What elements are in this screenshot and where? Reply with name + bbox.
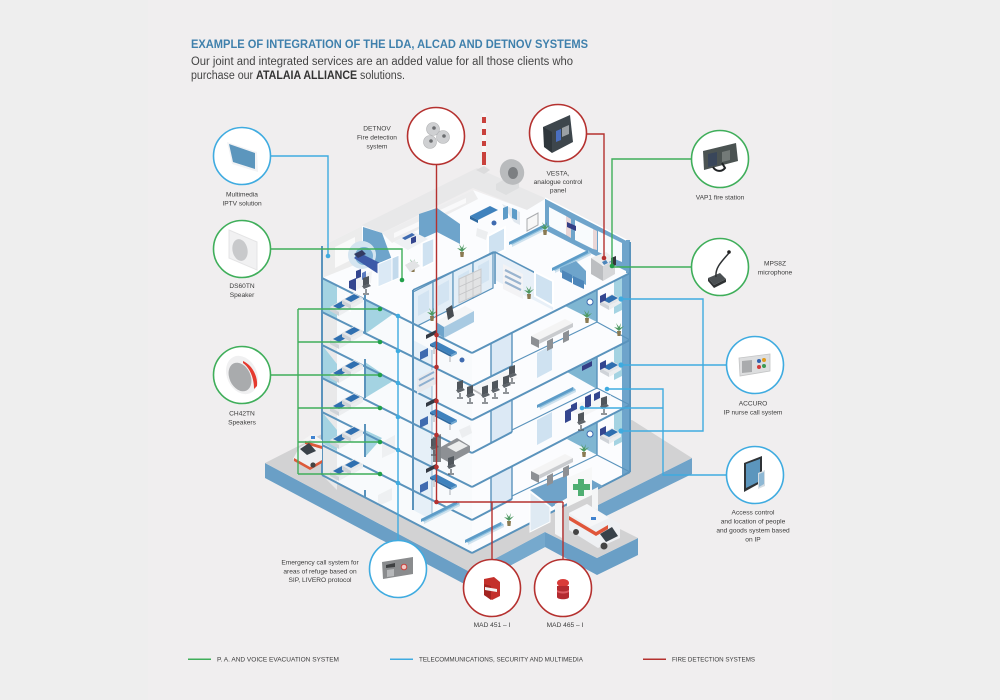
top floor plate xyxy=(322,190,630,353)
device: VESTA panel xyxy=(530,104,586,162)
connector: access control, blue xyxy=(580,387,726,475)
legend xyxy=(188,656,755,664)
nurse station with monitor xyxy=(591,252,616,281)
label: CH42TN: Speakers xyxy=(228,420,257,426)
label: MPS8Z: MPS8Z xyxy=(764,260,786,268)
connector: fire detection riser, red xyxy=(434,165,563,560)
label: VESTA: panel xyxy=(550,188,567,194)
left back wall xyxy=(322,226,362,278)
label: access control: and location of people xyxy=(721,518,786,526)
hospital beds, left wing xyxy=(330,293,363,481)
exam room furniture xyxy=(470,204,520,240)
label: emergency call: areas of refuge based on xyxy=(283,568,357,576)
legend item: fire detection: FIRE DETECTION SYSTEMS xyxy=(672,656,755,664)
shelf units xyxy=(459,264,523,303)
label: Multimedia IPTV: Multimedia xyxy=(226,192,258,198)
floor plants xyxy=(504,310,624,526)
satellite dish xyxy=(496,155,528,195)
device: DS60TN speaker xyxy=(214,220,270,278)
rear roof band wall xyxy=(382,190,478,243)
device: MPS8Z microphone xyxy=(692,238,748,296)
label: MPS8Z: microphone xyxy=(758,270,793,276)
label: DETNOV: Fire detection xyxy=(357,134,397,142)
left wing walls and rooms xyxy=(322,278,472,553)
connector: CH42TN speaker bus, green xyxy=(271,307,382,476)
label: VESTA: VESTA, xyxy=(547,170,569,178)
intro text: Our joint and integrated services are an added value for all those clients who xyxy=(191,56,573,68)
device: MAD 465-I siren xyxy=(534,560,592,616)
label: access control: on IP xyxy=(745,536,761,544)
doors of scanner room xyxy=(378,238,434,287)
office in back room xyxy=(394,232,467,272)
right back wall xyxy=(545,198,630,273)
label: emergency call: SIP, LIVERO protocol xyxy=(289,577,352,584)
label: VAP1: VAP1 fire station xyxy=(696,194,745,202)
label: access control: Access control xyxy=(732,510,774,516)
label: DS60TN: DS60TN xyxy=(229,283,255,290)
blue partition xyxy=(419,208,460,244)
device: CH42TN speaker xyxy=(214,346,270,404)
device: emergency call plate xyxy=(370,540,426,598)
legend item: telecommunications: TELECOMMUNICATIONS, SECURITY AND MULTIMEDIA xyxy=(419,656,584,664)
label: MAD 465: MAD 465 – I xyxy=(547,622,583,629)
floor lines, left to front xyxy=(322,246,472,553)
device: MAD 451-I call point xyxy=(464,560,520,616)
CT scanner xyxy=(348,241,390,275)
label: DETNOV: system xyxy=(367,144,388,150)
label: access control: and goods system based xyxy=(716,528,790,534)
ambulance at entrance xyxy=(569,504,620,550)
label: Multimedia IPTV: IPTV solution xyxy=(222,200,262,208)
picture on wall xyxy=(527,213,538,231)
floor lines, front to right xyxy=(472,242,630,553)
label: DS60TN: Speaker xyxy=(230,292,255,299)
title: EXAMPLE OF INTEGRATION OF THE LDA, ALCAD AND DETNOV SYSTEMS xyxy=(191,37,588,51)
intro text, second line: purchase our ATALAIA ALLIANCE solutions. xyxy=(191,70,405,82)
connector: ACCURO nurse call, blue xyxy=(618,296,726,434)
blue waiting benches, front xyxy=(421,387,576,545)
connector: DS60TN, green xyxy=(271,249,404,282)
connector: VESTA, red xyxy=(587,134,606,260)
workstations xyxy=(565,391,611,430)
device: access control tablet xyxy=(726,446,784,504)
blue waiting benches xyxy=(509,222,591,289)
label: MAD 451: MAD 451 – I xyxy=(474,622,510,629)
device: ACCURO xyxy=(726,336,784,394)
device: Multimedia IPTV xyxy=(214,128,270,184)
hospital building cutaway xyxy=(265,113,692,587)
office desk with chairs xyxy=(430,434,470,474)
label: DETNOV: DETNOV xyxy=(363,126,391,132)
clocks xyxy=(582,299,593,437)
legend item: PA and voice evacuation: P. A. AND VOICE EVACUATION SYSTEM xyxy=(217,656,339,664)
label: ACCURO: ACCURO xyxy=(739,400,767,408)
entrance with green cross sign xyxy=(530,467,603,538)
label: ACCURO: IP nurse call system xyxy=(724,410,783,416)
shelf and stools, central column xyxy=(417,358,472,438)
connector: multimedia, blue xyxy=(271,156,330,258)
door and plant by shelves xyxy=(524,272,553,306)
connector: VAP1 and MPS8Z, green xyxy=(610,159,691,268)
door to exam room xyxy=(488,227,505,258)
roof xyxy=(362,168,547,233)
device: VAP1 fire station xyxy=(692,130,748,188)
label: VESTA: analogue control xyxy=(534,179,583,186)
beds, right wing xyxy=(600,293,621,444)
label: emergency call: Emergency call system for xyxy=(281,560,359,566)
connector: emergency call riser, blue xyxy=(396,314,400,541)
right wing slabs and walls xyxy=(472,273,630,553)
exam tables, central column xyxy=(420,330,457,495)
ground plinth xyxy=(265,420,692,587)
device: DETNOV detectors xyxy=(408,108,464,164)
scanner room wall xyxy=(363,227,392,263)
label: CH42TN: CH42TN xyxy=(229,410,255,418)
meeting table with chairs xyxy=(456,365,518,403)
control workstation xyxy=(349,269,372,294)
gray benches xyxy=(531,319,573,486)
reception desk xyxy=(427,305,474,338)
roof mast xyxy=(476,113,490,174)
ambulance, rear left xyxy=(293,434,322,470)
reception wall panels xyxy=(413,252,553,328)
